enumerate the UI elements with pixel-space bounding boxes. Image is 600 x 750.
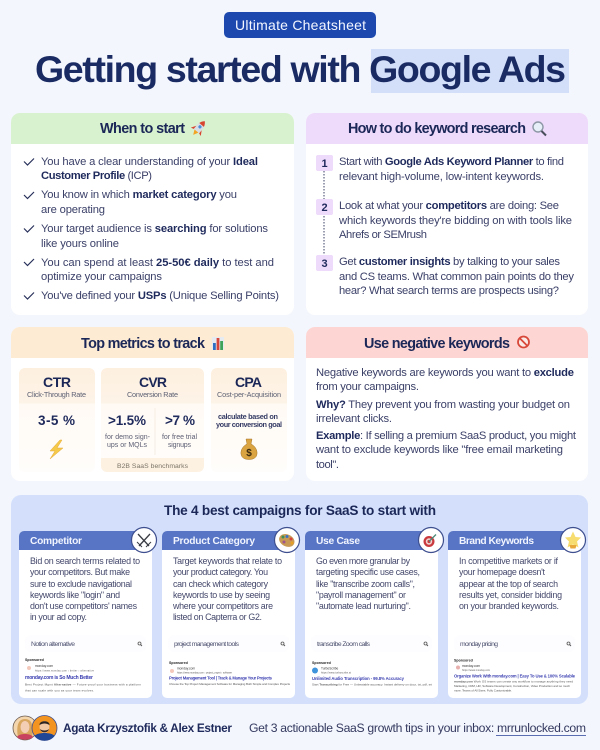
- metric card: CVR: >1.5%: [108, 413, 146, 428]
- icon: star badge: [560, 528, 586, 552]
- campaign description: on your branded keywords.: [459, 601, 559, 611]
- search bar: [311, 635, 432, 652]
- badge: Ultimate Cheatsheet: [224, 12, 376, 38]
- panel header: negative keywords: [306, 327, 588, 358]
- definition text: from your campaigns.: [316, 381, 419, 393]
- check item 3: Your target audience is searching for solutions: [41, 223, 268, 235]
- avatar: Alex: [32, 716, 57, 740]
- check item 1: [24, 156, 258, 182]
- dotted connector: [323, 171, 325, 255]
- step 2: Look at what your competitors are doing: See: [339, 200, 559, 212]
- sponsored ad result: Project Management Tool | Track & Manage Your Projects: [169, 676, 273, 680]
- example text: Example: If selling a premium SaaS product, you might: [316, 430, 577, 442]
- metric card: CPA: calculate based on: [218, 412, 278, 421]
- metric card: CVR: for free trial: [162, 434, 197, 441]
- sponsored ad result: [25, 658, 142, 692]
- check item 2: [24, 189, 237, 216]
- metric card: CTR: Click-Through Rate: [27, 390, 86, 399]
- panel: when to start: [11, 113, 294, 315]
- campaign card: product category: [162, 528, 300, 698]
- step 3: [316, 255, 574, 297]
- definition text: [316, 367, 574, 393]
- step 2: [316, 199, 572, 241]
- campaign description: [172, 556, 282, 622]
- title: Getting started with Google Ads: [35, 48, 566, 90]
- campaign description: your product category. You: [173, 567, 268, 577]
- sponsored ad result: monday.com: [35, 664, 53, 668]
- metric card: CVR: [101, 368, 204, 472]
- sponsored ad result: Best Project Mgmt Alternative — Future-proof your business with a platform: [25, 682, 142, 686]
- metric card: CPA: CPA: [235, 374, 262, 390]
- sponsored ad result: more. Teams of All Sizes. Fully Customizable.: [454, 688, 512, 692]
- sponsored ad result: Sponsored: [25, 658, 44, 662]
- panel: negative keywords: [306, 327, 588, 481]
- icon: magnifier: [533, 122, 546, 136]
- step 3: Get customer insights by talking to your sales: [339, 256, 560, 268]
- check item 2: You know in which market category you: [41, 189, 237, 201]
- campaign description: in your ad copy.: [30, 612, 87, 622]
- icon: target: [418, 528, 444, 552]
- check item 3: like yours online: [41, 238, 119, 250]
- icon: prohibited: [518, 336, 529, 348]
- campaign card: competitor: [19, 528, 156, 698]
- campaign description: [459, 556, 562, 611]
- sponsored ad result: https://www.monday.com › project_mgmt › software: [177, 672, 233, 674]
- campaign description: [30, 556, 140, 622]
- search bar: monday pricing: [460, 641, 498, 648]
- sponsored ad result: monday.com: [177, 666, 195, 670]
- metric card: CTR: [19, 368, 95, 472]
- step 2: which keywords they're bidding on with tools like: [338, 215, 572, 227]
- campaign description: your competitors. But make: [30, 567, 130, 577]
- avatar: Agata: [13, 716, 37, 740]
- metric card: CPA: your conversion goal: [216, 420, 282, 429]
- example text: [315, 430, 577, 471]
- sponsored ad result: Sponsored: [169, 661, 188, 665]
- campaign description: "automate lead nurturing".: [316, 601, 411, 611]
- footer: [13, 716, 586, 740]
- sponsored ad result: Sponsored: [312, 661, 331, 665]
- check item 4: You can spend at least 25-50€ daily to test and: [41, 257, 274, 269]
- campaign card: brand keywords: Brand Keywords: [459, 536, 534, 547]
- step 3: and CS teams. What common pain points do they: [339, 271, 574, 283]
- panel header: top metrics: [11, 327, 294, 358]
- icon: rocket: [188, 117, 210, 139]
- sponsored ad result: that can scale with you as your team evolves.: [25, 688, 94, 692]
- search bar: Notion alternative: [31, 641, 75, 648]
- example text: tool".: [316, 459, 339, 471]
- sponsored ad result: Unlimited Audio Transcription - 99.8% Accuracy: [312, 676, 405, 681]
- heading: campaigns: The 4 best campaigns for SaaS to start with: [164, 503, 436, 518]
- checklist: [24, 156, 279, 302]
- sponsored ad result: monday.com Work OS teams can create any workflow to manage anything they need: [454, 680, 573, 684]
- sponsored ad result: [312, 661, 432, 686]
- sponsored ad result: https://www.turboscribe.ai: [321, 672, 351, 674]
- search bar: [168, 635, 289, 652]
- sponsored ad result: TurboScribe: [321, 666, 338, 670]
- newsletter call to action: Get 3 actionable SaaS growth tips in your inbox: mrrunlocked.com: [249, 721, 586, 735]
- panel header: when to start: [11, 113, 294, 144]
- search bar: [25, 635, 146, 652]
- campaign description: sure to exclude navigational: [30, 579, 132, 589]
- campaign description: In competitive markets or if: [459, 556, 559, 566]
- panel header: when to start: When to start: [100, 121, 185, 137]
- sponsored ad result: Marketing, CRM, HR, Software Development, Construction, Video Production and so much: [454, 684, 570, 688]
- campaign description: [316, 556, 420, 611]
- sponsored ad result: monday.com: [462, 664, 480, 668]
- metric card: CVR: signups: [168, 442, 192, 449]
- check item 1: You have a clear understanding of your Ideal: [41, 156, 258, 168]
- why text: Why? They prevent you from wasting your budget on: [316, 399, 570, 411]
- icon: palette: [274, 528, 300, 552]
- search bar: project management tools: [174, 641, 240, 648]
- campaign description: don't use competitors' names: [30, 601, 138, 611]
- campaign card: use case: Use Case: [316, 536, 360, 547]
- campaign description: where your competitors are: [172, 601, 273, 611]
- step 1: 1: [321, 158, 328, 170]
- definition text: Negative keywords are keywords you want to exclude: [316, 367, 574, 379]
- step 1: [316, 155, 564, 183]
- campaign description: keywords like "login" and: [30, 590, 120, 600]
- campaign description: targeting specific use cases,: [316, 567, 420, 577]
- panel: keyword research: [306, 113, 588, 315]
- why text: irrelevant clicks.: [316, 413, 392, 425]
- metric card: CVR: Conversion Rate: [127, 390, 178, 399]
- sponsored ad result: Choose the Top Project Management Software for Managing Both Simple and Complex Projects: [169, 682, 290, 686]
- icon: bar chart: [212, 337, 224, 350]
- badge: Ultimate Cheatsheet: Ultimate Cheatsheet: [235, 17, 366, 33]
- icon: money bag: $: [246, 448, 252, 459]
- icon: lightning: [50, 440, 63, 459]
- sponsored ad result: https://www.monday.com: [462, 669, 490, 672]
- benchmark note: B2B SaaS benchmarks: [117, 463, 189, 470]
- metric card: CTR: 3-5 %: [38, 413, 75, 428]
- panel: campaigns: [11, 495, 588, 704]
- sponsored ad result: Start Transcribing for Free — Unbeatable accuracy. Instant delivery on docx, txt, pdf, srt: [312, 682, 432, 686]
- campaign description: Go even more granular by: [316, 556, 411, 566]
- campaign description: can check which category: [173, 579, 269, 589]
- example text: want to exclude keywords like "free email marketing: [315, 444, 563, 456]
- panel header: negative keywords: Use negative keywords: [364, 336, 510, 352]
- campaign card: use case: [305, 528, 444, 698]
- step 2: Ahrefs or SEMrush: [339, 229, 427, 241]
- metric card: CPA: Cost-per-Acquisition: [217, 390, 281, 399]
- campaign description: listed on Capterra or G2.: [173, 612, 262, 622]
- sponsored ad result: [454, 658, 576, 692]
- campaign description: like "transcribe zoom calls",: [316, 579, 415, 589]
- check item 5: You've defined your USPs (Unique Selling Points): [41, 290, 279, 302]
- panel header: top metrics: Top metrics to track: [81, 336, 206, 352]
- step 3: 3: [321, 258, 328, 270]
- sponsored ad result: monday.com is So Much Better: [25, 675, 93, 681]
- campaign description: keywords to use by seeing: [173, 590, 270, 600]
- sponsored ad result: Sponsored: [454, 658, 473, 662]
- campaign description: appear at the top of search: [459, 579, 558, 589]
- campaign description: "payroll management" or: [316, 590, 406, 600]
- campaign description: Bid on search terms related to: [30, 556, 140, 566]
- campaign card: product category: Product Category: [173, 536, 255, 547]
- metric card: CPA: [211, 368, 287, 472]
- step 1: relevant high-volume, low-intent keywords.: [339, 171, 544, 183]
- check item 1: Customer Profile (ICP): [41, 170, 152, 182]
- metric card: CVR: >7 %: [165, 413, 195, 428]
- step 1: Start with Google Ads Keyword Planner to find: [339, 156, 564, 168]
- metric card: CTR: CTR: [43, 374, 71, 390]
- campaign description: results yet, consider bidding: [459, 590, 562, 600]
- campaign description: Target keywords that relate to: [173, 556, 282, 566]
- campaign card: competitor: Competitor: [30, 536, 82, 547]
- metric card: CVR: ups or MQLs: [107, 442, 148, 449]
- authors: Agata Krzysztofik & Alex Estner: [63, 721, 232, 735]
- campaign card: brand keywords: [448, 528, 586, 698]
- campaign description: your homepage doesn't: [459, 567, 546, 577]
- panel: top metrics: [11, 327, 294, 481]
- sponsored ad result: Organize Work With monday.com | Easy To Use & 100% Scalable: [454, 674, 576, 678]
- search bar: [454, 635, 575, 652]
- search bar: transcribe Zoom calls: [317, 641, 371, 648]
- sponsored ad result: [169, 661, 290, 686]
- check item 3: [24, 223, 268, 250]
- step 2: 2: [321, 202, 328, 214]
- check item 4: optimize your campaigns: [41, 271, 162, 283]
- metric card: CVR: CVR: [139, 374, 167, 390]
- sponsored ad result: https://www.monday.com › better › alternative: [35, 670, 95, 672]
- check item 4: [24, 257, 274, 283]
- icon: crossed swords: [132, 528, 156, 552]
- metric card: CVR: for demo sign-: [105, 434, 151, 441]
- panel header: keyword research: How to do keyword research: [348, 121, 526, 137]
- why text: [316, 399, 570, 425]
- check item 2: are operating: [41, 204, 105, 216]
- panel header: keyword research: [306, 113, 588, 144]
- step 3: hear? What search terms are prospects using?: [339, 285, 559, 297]
